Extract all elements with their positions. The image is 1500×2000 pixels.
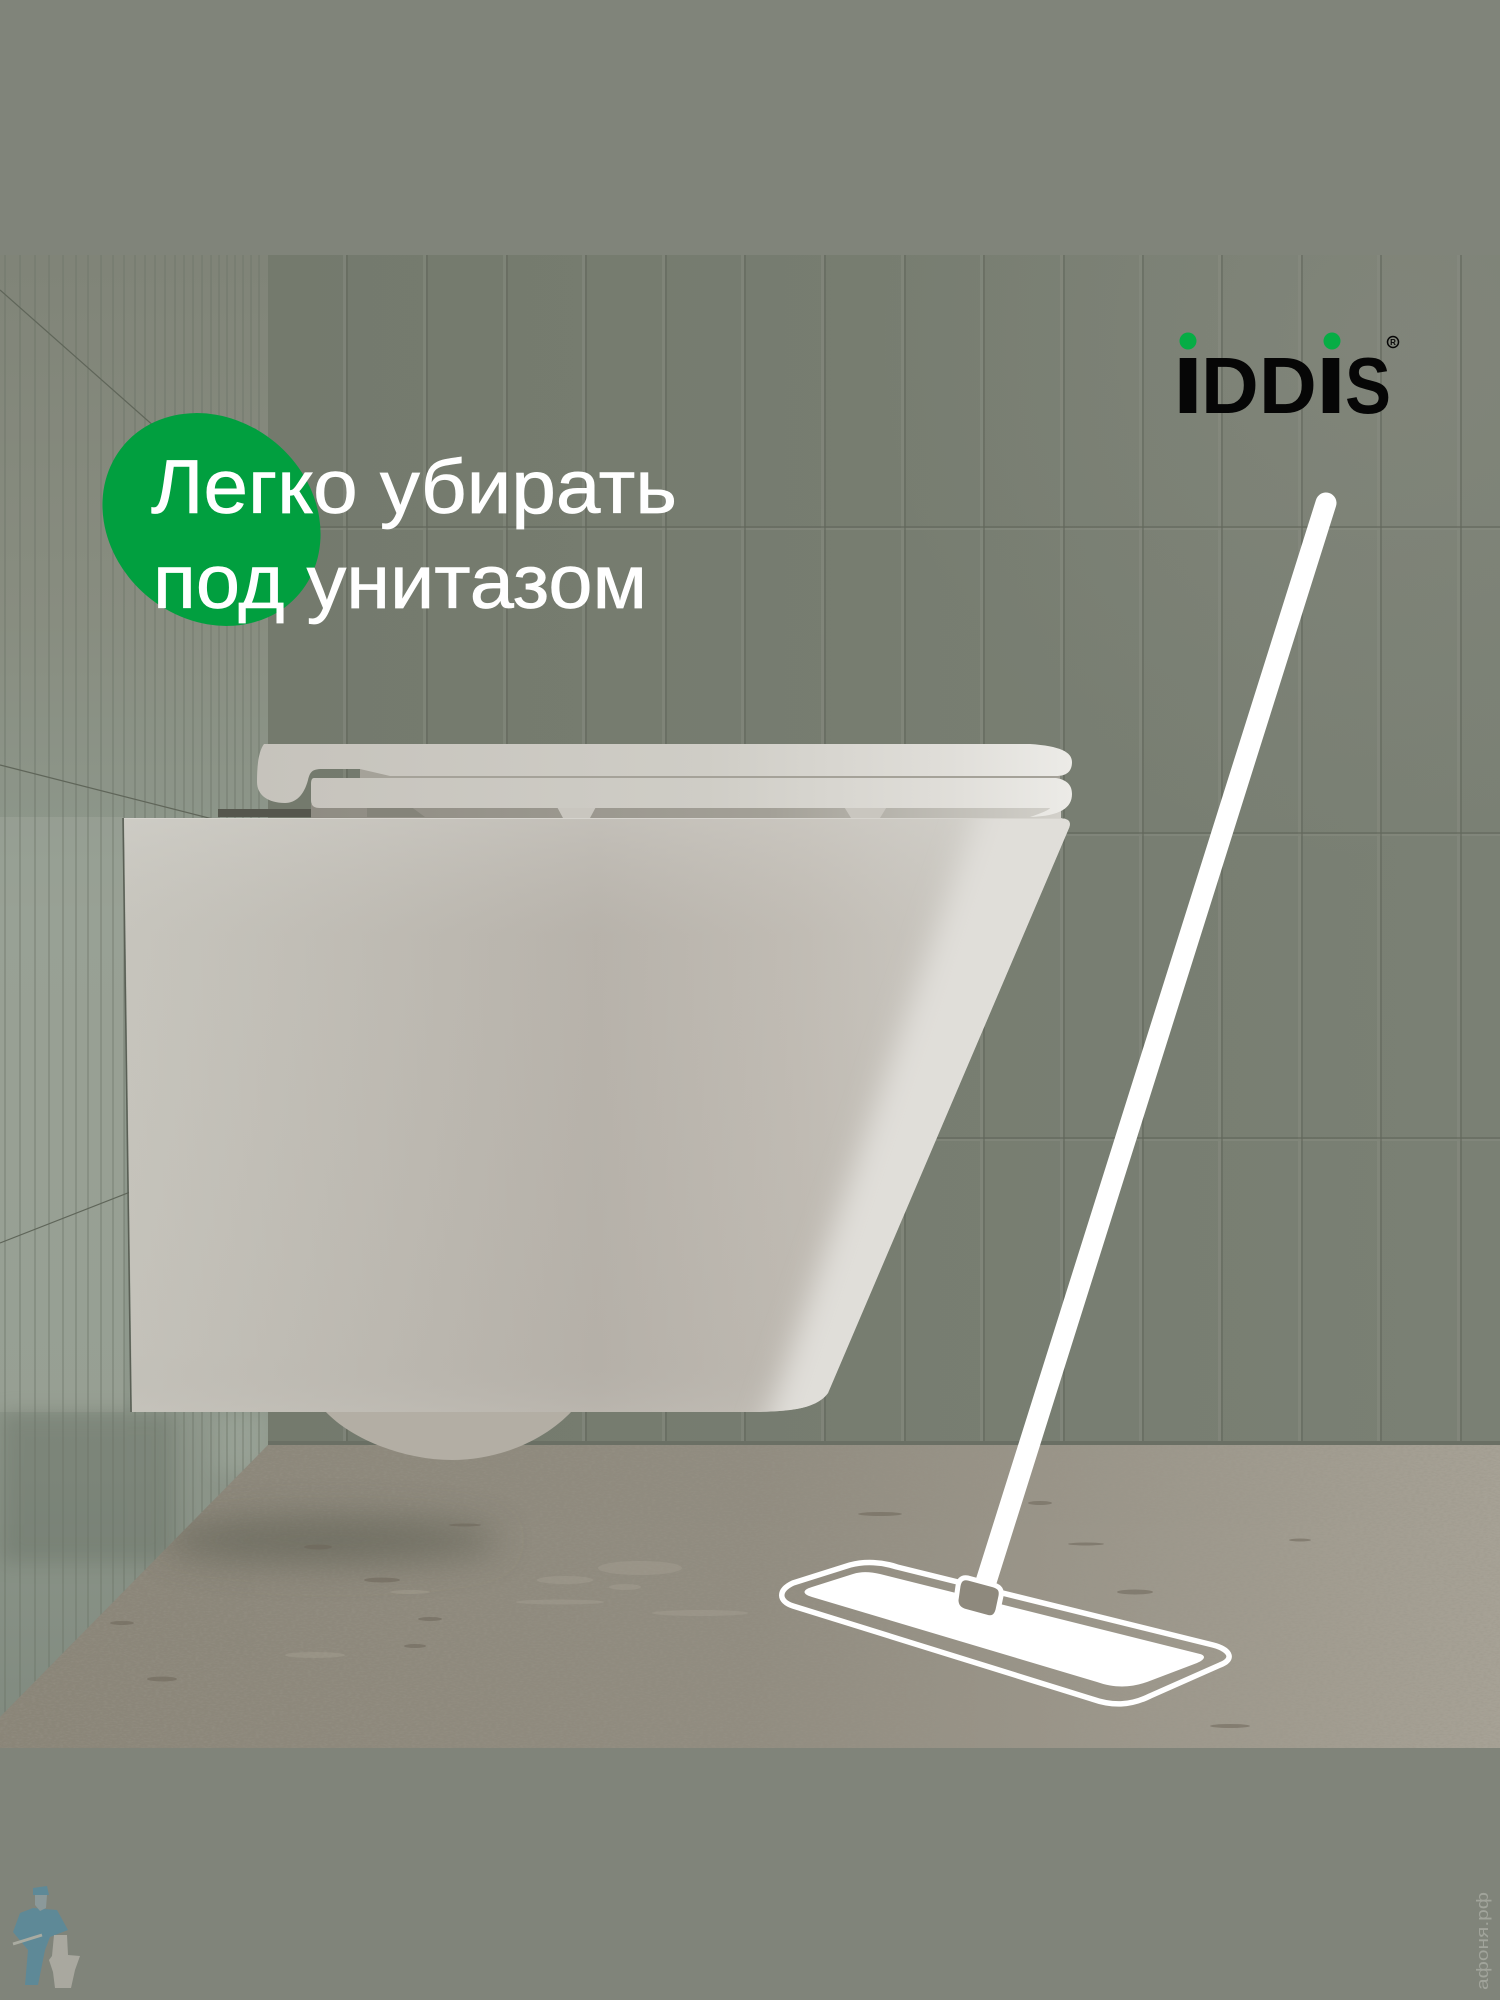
background band: bottom [0,1748,1500,2000]
logo: IDDIS: R [1390,338,1396,347]
watermark text: афоня.рф [1473,1892,1492,1990]
mop pad [804,1572,1204,1686]
small toilet [49,1935,80,1988]
logo: IDDIS [1172,332,1398,430]
panel: tiled back wall [268,255,1500,1447]
logo: IDDIS: D [1201,341,1259,430]
toilet [120,744,1110,1460]
ceramic highlight [759,818,1070,1412]
plumber figure [13,1886,68,1985]
logo: IDDIS: S [1345,341,1391,430]
ceramic body [124,818,1070,1412]
logo: IDDIS: D [1259,341,1317,430]
logo: IDDIS: I [1315,341,1347,430]
hinge hardware [218,804,1061,818]
mop handle [985,503,1326,1585]
toilet seat ring [311,778,1072,817]
floor stone speckles [110,1501,1311,1728]
logo: IDDIS: I [1172,341,1204,430]
heading [151,445,677,625]
green blob behind heading [59,369,364,670]
toilet shadow on floor [160,1518,500,1562]
icon: plumber watermark [13,1886,80,1988]
mop connector [956,1578,1001,1618]
icon: mop [782,503,1326,1704]
wall-side edge of ceramic [123,818,131,1412]
heading: под унитазом [153,540,647,625]
mop head outline [782,1563,1229,1704]
background band: top [0,0,1500,255]
toilet seat lid [257,744,1072,803]
heading: Легко убирать [151,445,677,530]
panel: striped side wall [0,255,268,1717]
panel: stone floor [0,1445,1500,1748]
toilet bowl underside [325,1411,572,1460]
gap between lid and ring [360,768,1060,780]
